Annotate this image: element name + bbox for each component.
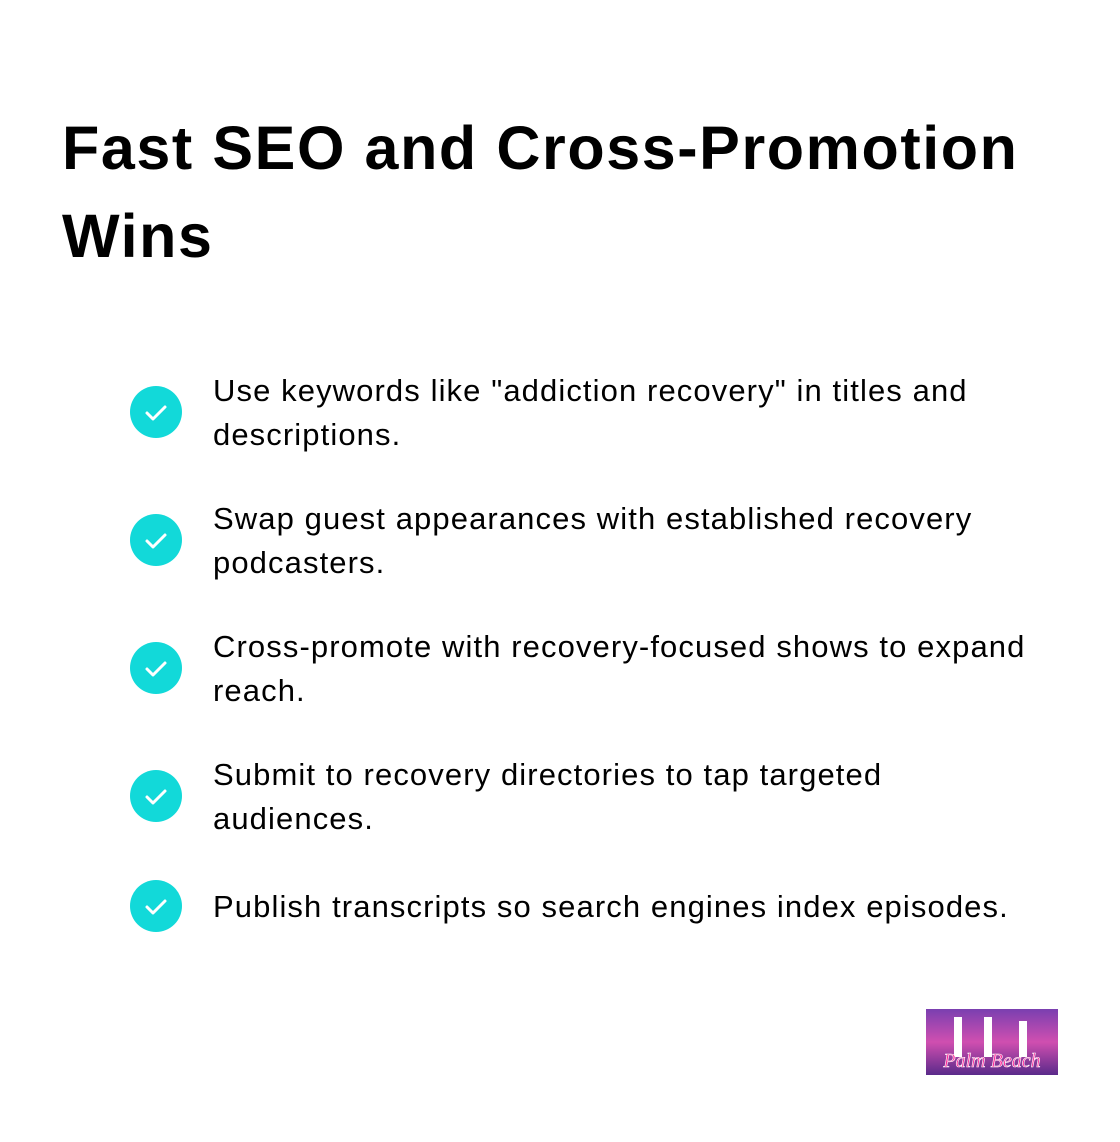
- text: [213, 757, 882, 836]
- text: [213, 629, 1025, 708]
- title: Fast SEO and Cross-Promotion: [62, 114, 1019, 182]
- text: podcasters.: [213, 545, 385, 580]
- item 4: [130, 757, 882, 836]
- title: [62, 114, 1019, 270]
- text: Cross-promote with recovery-focused shows to expand: [213, 629, 1025, 664]
- text: Swap guest appearances with established recovery: [213, 501, 972, 536]
- icon: check: [130, 514, 182, 566]
- text: Publish transcripts so search engines index episodes.: [213, 889, 1009, 924]
- item 3: [130, 629, 1025, 708]
- text: Submit to recovery directories to tap targeted: [213, 757, 882, 792]
- logo: [926, 1009, 1058, 1075]
- text: Use keywords like "addiction recovery" in titles and: [213, 373, 968, 408]
- text: descriptions.: [213, 417, 401, 452]
- icon: check: [130, 642, 182, 694]
- text: audiences.: [213, 801, 374, 836]
- item 1: [130, 373, 968, 452]
- icon: check: [130, 880, 182, 932]
- item 5: [130, 880, 1009, 932]
- title: Wins: [62, 202, 214, 270]
- text: reach.: [213, 673, 306, 708]
- icon: check: [130, 770, 182, 822]
- icon: check: [130, 386, 182, 438]
- logo: Palm Beach: [942, 1050, 1041, 1072]
- text: [213, 501, 972, 580]
- text: [213, 373, 968, 452]
- item 2: [130, 501, 972, 580]
